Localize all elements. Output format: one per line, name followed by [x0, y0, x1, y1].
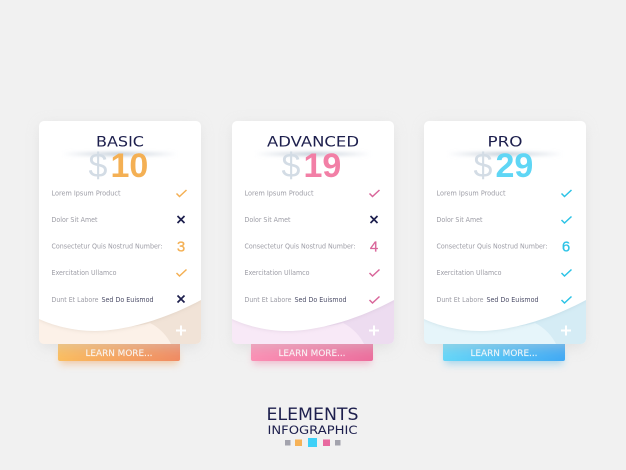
feature list: pro: Exercitation Ullamco [436, 269, 502, 277]
heading: advanced: ADVANCED [267, 134, 359, 150]
logo: elements infographic [266, 405, 358, 447]
price: $19: 19 [304, 147, 341, 185]
price: $29 [474, 147, 533, 185]
feature list: basic: 3 [177, 238, 185, 256]
icon: plus [561, 326, 571, 336]
panel: basic plan [39, 121, 201, 364]
feature list: advanced [244, 190, 380, 304]
icon: plus [369, 326, 379, 336]
heading: basic: BASIC [96, 134, 144, 150]
feature list: basic: Consectetur Quis Nostrud Number: [52, 242, 162, 250]
feature list: pro: 6 [562, 238, 570, 256]
feature list: basic: Lorem Ipsum Product [52, 190, 121, 198]
feature list: pro: Consectetur Quis Nostrud Number: [436, 242, 548, 250]
feature list: basic [52, 190, 186, 304]
feature list: advanced: Lorem Ipsum Product [244, 190, 314, 198]
button: pro learn more [443, 340, 565, 364]
feature list: basic: Exercitation Ullamco [52, 269, 116, 277]
feature list: advanced: 4 [370, 238, 378, 256]
price: $29: $ [474, 147, 492, 185]
price: $10 [88, 147, 148, 185]
panel: pro plan [424, 121, 586, 364]
price: $19 [282, 147, 341, 185]
card: pro [424, 121, 586, 347]
feature list: advanced: Sed Do Euismod [294, 296, 346, 304]
heading: pro: PRO [488, 134, 522, 150]
feature list: basic: Dolor Sit Amet [52, 216, 98, 224]
feature list: advanced: Consectetur Quis Nostrud Number: [244, 242, 356, 250]
icon: plus [176, 326, 186, 336]
feature list: pro: Dunt Et Labore [436, 296, 484, 304]
feature list: advanced: Dolor Sit Amet [244, 216, 291, 224]
button: basic learn more: LEARN MORE... [86, 349, 152, 359]
price: $29: 29 [496, 147, 533, 185]
price: $19: $ [282, 147, 300, 185]
feature list: pro [436, 190, 572, 304]
feature list: pro: Dolor Sit Amet [436, 216, 483, 224]
price: $10: 10 [110, 147, 148, 185]
feature list: basic: Dunt Et Labore [52, 296, 98, 304]
feature list: pro: Sed Do Euismod [486, 296, 538, 304]
panel: advanced plan [232, 121, 394, 364]
button: advanced learn more [251, 340, 373, 364]
card: basic [39, 121, 201, 347]
button: pro learn more: LEARN MORE... [470, 349, 538, 359]
price: $10: $ [88, 147, 108, 185]
button: advanced learn more: LEARN MORE... [278, 349, 346, 359]
logo: elements infographic: ELEMENTS [266, 405, 358, 424]
feature list: basic: Sed Do Euismod [102, 296, 154, 304]
feature list: pro: Lorem Ipsum Product [436, 190, 506, 198]
feature list: advanced: Dunt Et Labore [244, 296, 292, 304]
logo: elements infographic: INFOGRAPHIC [268, 423, 358, 437]
card: advanced [232, 121, 394, 347]
button: basic learn more [58, 340, 180, 364]
feature list: advanced: Exercitation Ullamco [244, 269, 310, 277]
